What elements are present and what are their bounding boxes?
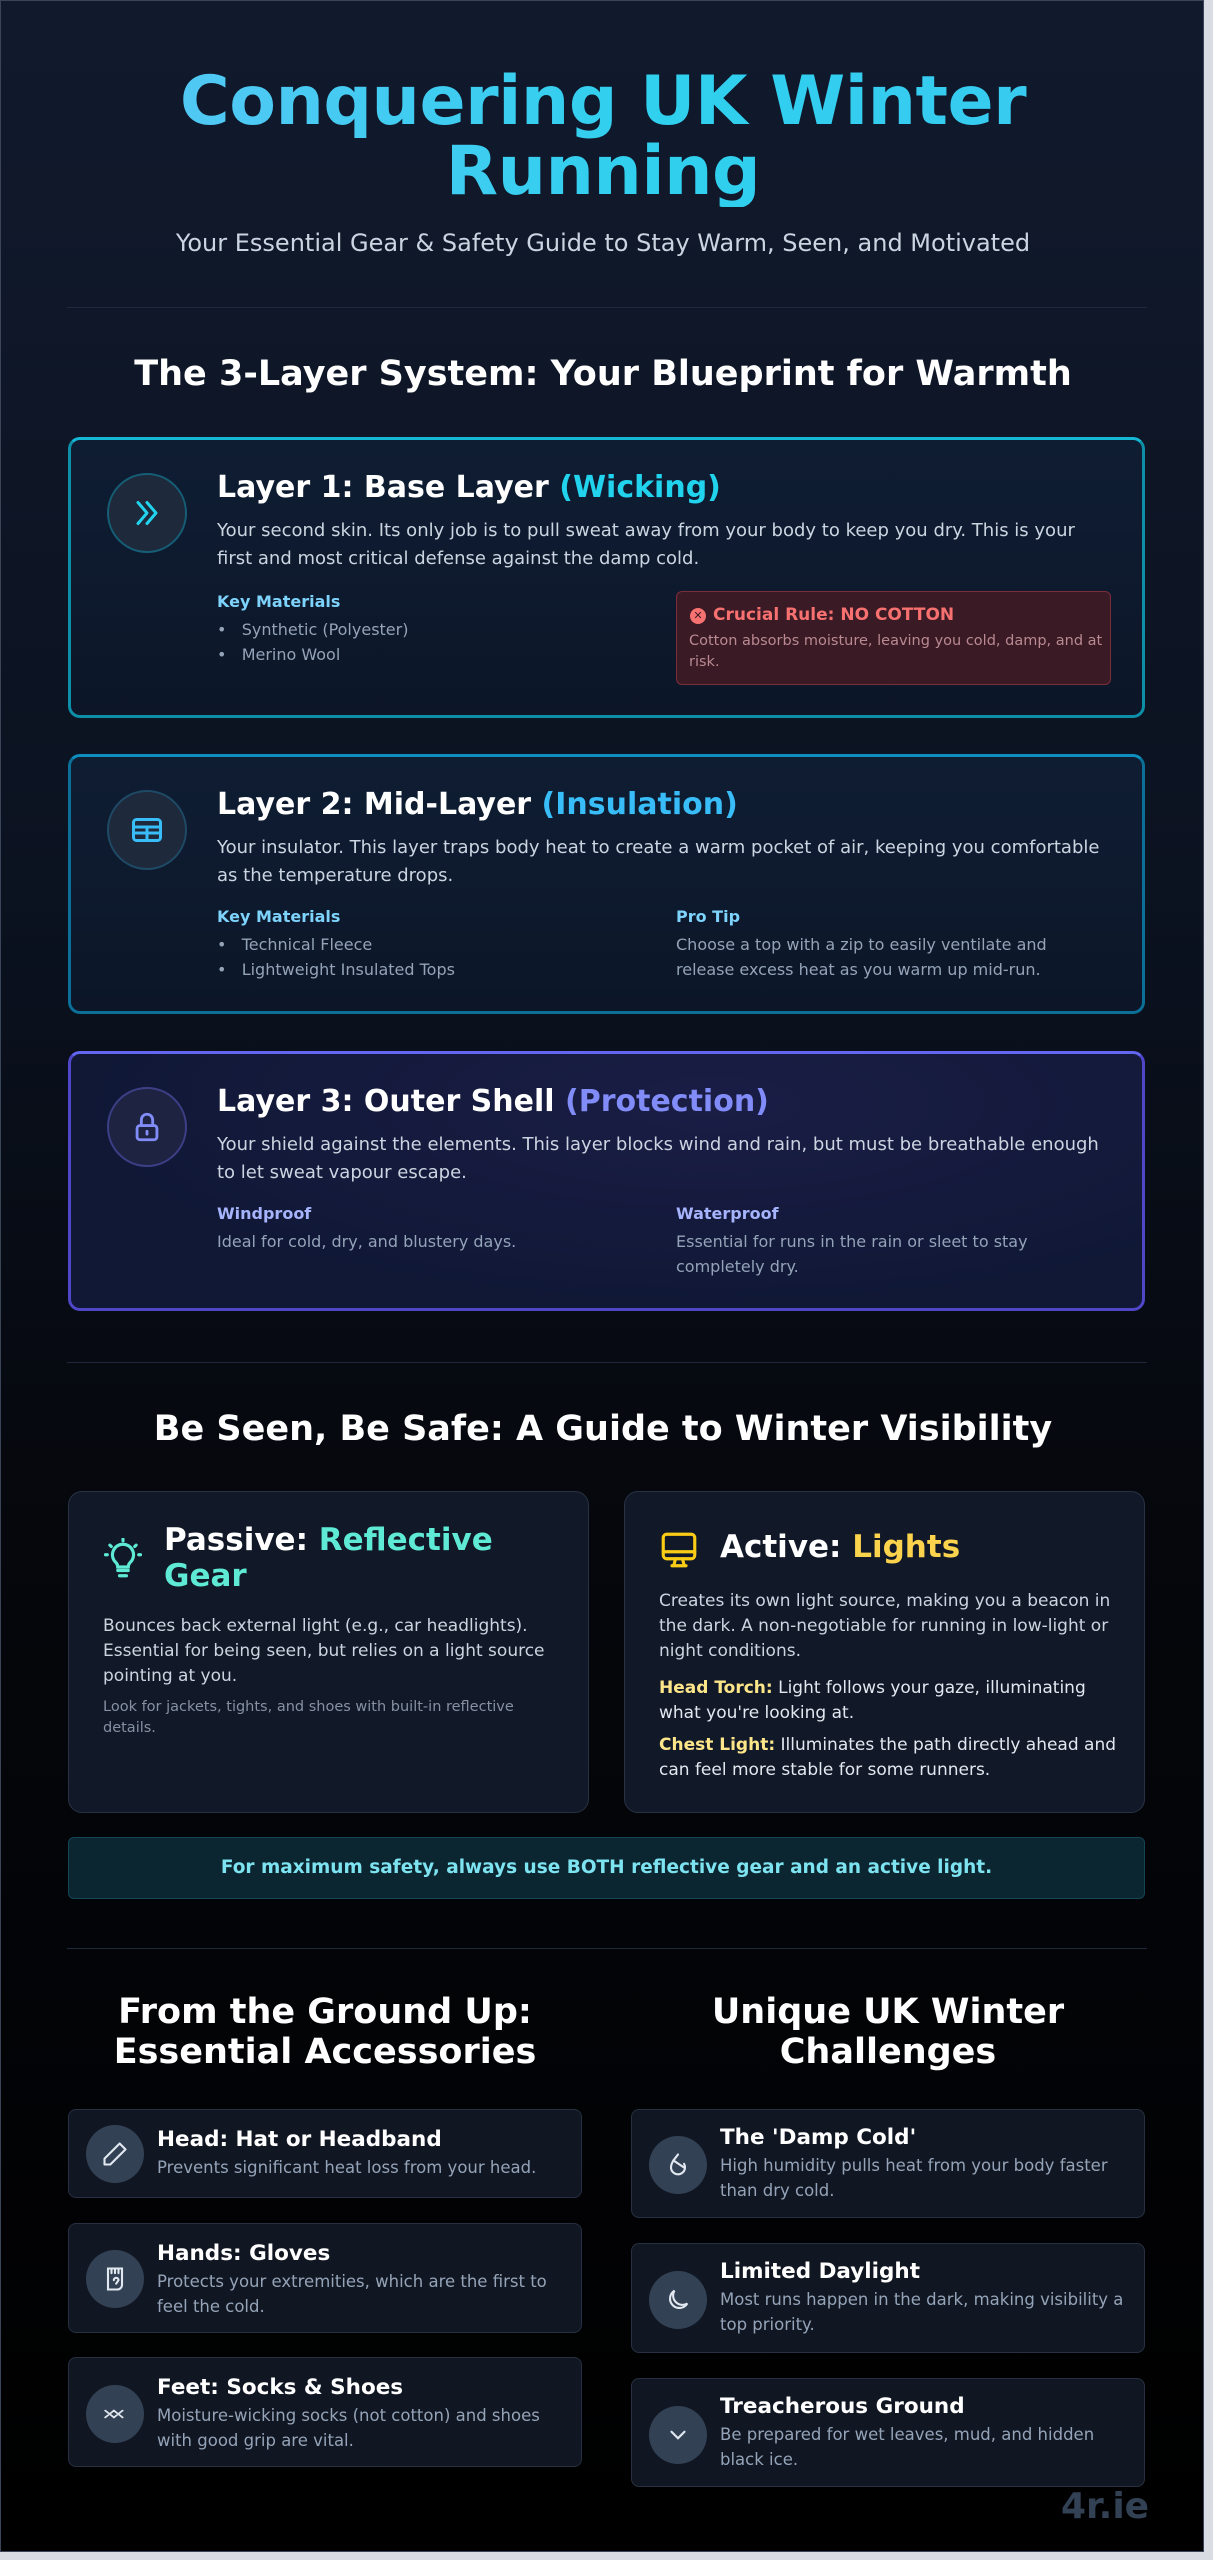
title: Running (446, 132, 760, 211)
layer 3 title: Layer 3: Outer Shell (Protection) (217, 1084, 769, 1119)
card: daylight: Limited Daylight (720, 2259, 920, 2284)
card: head: Head: Hat or Headband (157, 2127, 442, 2152)
icon: chevrons (107, 473, 187, 553)
heading: challenges (712, 1992, 1064, 2072)
panel: layer 2: • Technical Fleece (217, 935, 372, 954)
icon: laces (86, 2385, 144, 2443)
icon: lock (107, 1087, 187, 1167)
callout: safety banner: For maximum safety, always use BOTH reflective gear and an active light. (221, 1857, 992, 1878)
panel: layer 2 (68, 754, 1145, 1014)
panel: layer 3 (68, 1051, 1145, 1311)
icon: monitor light (662, 1532, 696, 1568)
card: daylight: Most runs happen in the dark, making visibility a top priority. (720, 2290, 1123, 2334)
icon: chevron down (649, 2406, 707, 2464)
watermark: 4r.ie (1061, 2486, 1149, 2527)
panel: layer 2: Choose a top with a zip to easily ventilate and release excess heat as you warm up mid-run. (676, 935, 1047, 979)
heading: challenges: Unique UK Winter (712, 1992, 1064, 2032)
layer 3 description: Your shield against the elements. This layer blocks wind and rain, but must be breathable enough to let sweat vapour escape. (217, 1134, 1099, 1183)
passive title: Gear (164, 1558, 247, 1594)
key materials: Key Materials (217, 592, 340, 611)
card: feet: Moisture-wicking socks (not cotton) and shoes with good grip are vital. (157, 2406, 540, 2450)
layer 1 description: Your second skin. Its only job is to pull sweat away from your body to keep you dry. This is your first and most critical defense against the damp cold. (217, 520, 1075, 569)
heading: accessories: Essential Accessories (114, 2032, 536, 2072)
waterproof: Waterproof (676, 1204, 779, 1223)
icon: moon (649, 2271, 707, 2329)
chest light: Chest Light: Illuminates the path directly ahead and can feel more stable for some runners. (659, 1735, 1116, 1780)
panel: layer 1: • Synthetic (Polyester) (217, 620, 408, 639)
heading: challenges: Challenges (780, 2032, 996, 2072)
card: head: Prevents significant heat loss from your head. (157, 2158, 536, 2177)
heading: visibility: Be Seen, Be Safe: A Guide to Winter Visibility (154, 1409, 1052, 1449)
card: feet: Feet: Socks & Shoes (157, 2375, 403, 2400)
panel: active (624, 1491, 1145, 1813)
panel: layer 1: • Merino Wool (217, 645, 340, 664)
passive description: Bounces back external light (e.g., car headlights). Essential for being seen, but relies on a light source pointing at you. (103, 1616, 545, 1686)
callout: no cotton: Cotton absorbs moisture, leaving you cold, damp, and at risk. (689, 633, 1102, 670)
card: ground (631, 2378, 1145, 2487)
passive title (164, 1522, 493, 1594)
icon: glove (86, 2250, 144, 2308)
active title: Active: Lights (720, 1529, 960, 1565)
title (1, 67, 1205, 207)
subtitle: Your Essential Gear & Safety Guide to Stay Warm, Seen, and Motivated (176, 229, 1030, 257)
passive title: Passive: Reflective (164, 1522, 493, 1558)
card: hands: Protects your extremities, which are the first to feel the cold. (157, 2272, 547, 2316)
card: damp cold: The 'Damp Cold' (720, 2125, 916, 2150)
panel: layer 3: Essential for runs in the rain or sleet to stay completely dry. (676, 1232, 1028, 1276)
card: ground: Treacherous Ground (720, 2394, 965, 2419)
pro tip: Pro Tip (676, 907, 740, 926)
card: head (68, 2109, 582, 2198)
callout: safety banner (68, 1837, 1145, 1899)
heading: accessories: From the Ground Up: (118, 1992, 532, 2032)
passive tip: Look for jackets, tights, and shoes with built-in reflective details. (103, 1699, 514, 1736)
panel: layer 2: • Lightweight Insulated Tops (217, 960, 455, 979)
layer 1 title: Layer 1: Base Layer (Wicking) (217, 470, 721, 505)
icon: pencil (86, 2125, 144, 2183)
card: feet (68, 2357, 582, 2467)
panel: layer 3: Ideal for cold, dry, and blustery days. (217, 1232, 516, 1251)
card: hands: Hands: Gloves (157, 2241, 330, 2266)
icon: droplet (649, 2136, 707, 2194)
panel: layer 1 (68, 437, 1145, 718)
card: damp cold (631, 2109, 1145, 2218)
card: daylight (631, 2243, 1145, 2353)
card: ground: Be prepared for wet leaves, mud, and hidden black ice. (720, 2425, 1094, 2469)
title: Conquering UK Winter (180, 62, 1026, 141)
card: hands (68, 2223, 582, 2333)
layer 2 title: Layer 2: Mid-Layer (Insulation) (217, 787, 738, 822)
callout: no cotton: Crucial Rule: NO COTTON (713, 605, 954, 625)
windproof: Windproof (217, 1204, 311, 1223)
layer 2 description: Your insulator. This layer traps body heat to create a warm pocket of air, keeping you comfortable as the temperature drops. (217, 837, 1099, 886)
heading: 3-layer system: The 3-Layer System: Your Blueprint for Warmth (134, 354, 1072, 394)
head torch: Head Torch: Light follows your gaze, illuminating what you're looking at. (659, 1678, 1086, 1723)
callout: no cotton: ✕ (693, 609, 703, 622)
key materials: Key Materials (217, 907, 340, 926)
callout: no cotton (676, 591, 1111, 685)
icon: fleece (107, 790, 187, 870)
active description: Creates its own light source, making you a beacon in the dark. A non-negotiable for running in low-light or night conditions. (659, 1591, 1110, 1661)
panel: passive (68, 1491, 589, 1813)
card: damp cold: High humidity pulls heat from your body faster than dry cold. (720, 2156, 1108, 2200)
icon: bulb (104, 1538, 142, 1578)
heading: accessories (114, 1992, 536, 2072)
